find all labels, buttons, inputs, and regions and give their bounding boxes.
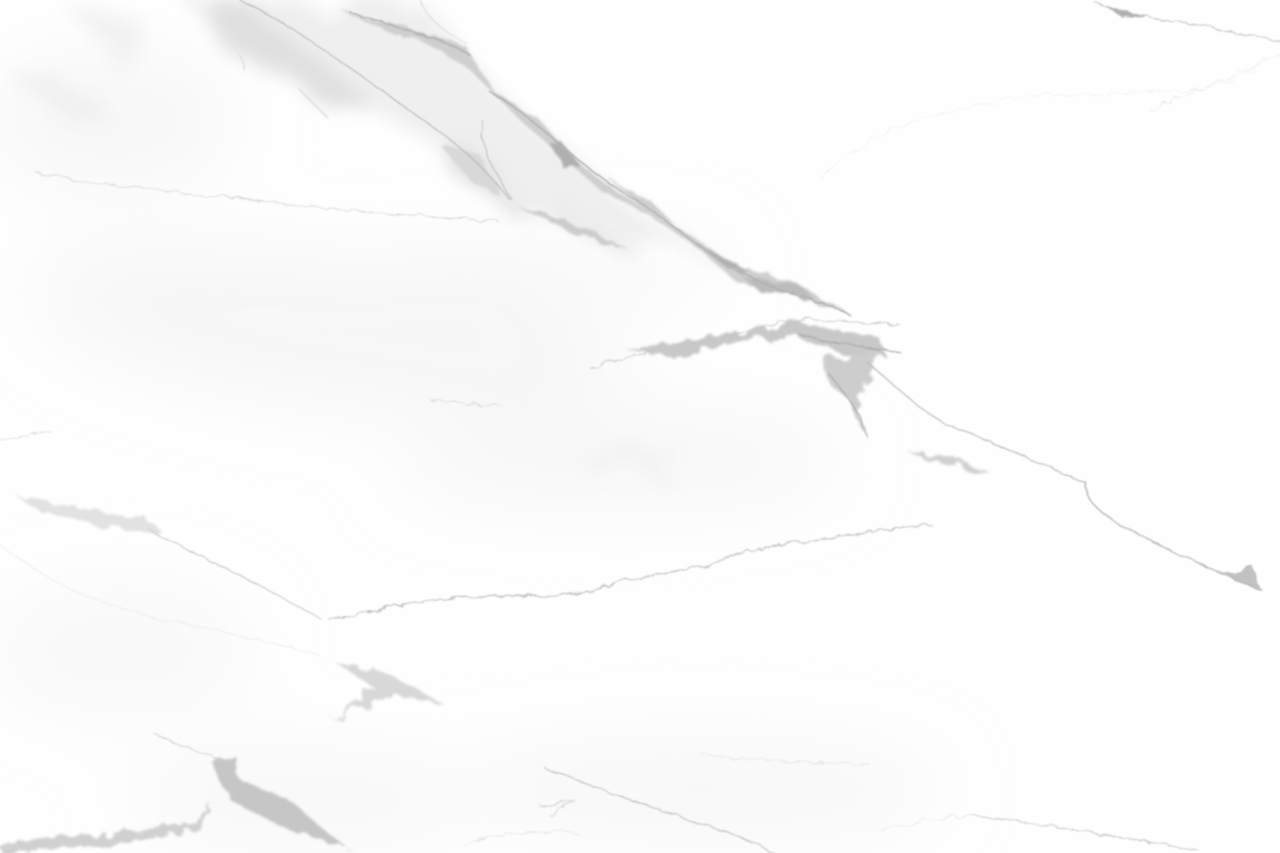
upper-left grey wash along the main vein: [0, 0, 760, 475]
lower-left veins: [0, 662, 1200, 853]
central vein cluster: [590, 320, 1085, 482]
soft cloud shading: [0, 60, 940, 845]
top-right vein: [820, 2, 1280, 180]
main diagonal vein: [195, 0, 850, 315]
long faint left vein: [0, 172, 500, 440]
middle wavy vein: [0, 495, 930, 655]
right-hand lower vein: [1085, 482, 1262, 590]
